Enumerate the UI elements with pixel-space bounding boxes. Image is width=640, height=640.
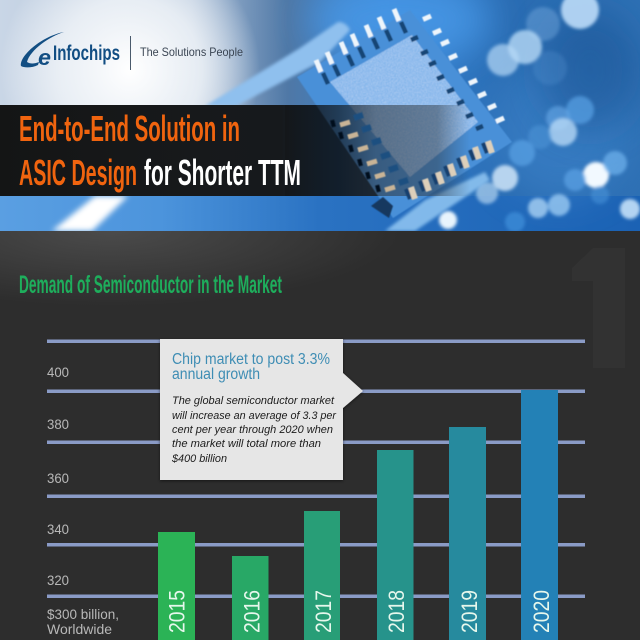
bar 2017: 2017 bbox=[311, 590, 336, 633]
lower beam bbox=[52, 196, 128, 231]
bar 2018 bbox=[377, 450, 414, 640]
callout body: will increase an average of 3.3 per bbox=[172, 410, 337, 422]
callout bbox=[160, 339, 363, 480]
dark content panel bbox=[0, 231, 640, 640]
bar 2015: 2015 bbox=[164, 590, 190, 633]
top chip pins bbox=[316, 9, 504, 122]
y axis labels: $300 billion, bbox=[47, 606, 119, 622]
title band bbox=[0, 105, 470, 196]
bar 2015 bbox=[158, 532, 195, 640]
callout heading: annual growth bbox=[172, 366, 260, 383]
bar 2016 bbox=[232, 556, 268, 640]
bar 2019: 2019 bbox=[457, 590, 482, 633]
logo: The Solutions People bbox=[140, 45, 243, 59]
lower chip pins bbox=[331, 115, 492, 218]
callout body: $400 billion bbox=[171, 453, 227, 465]
y axis labels bbox=[47, 364, 119, 637]
y axis labels: 320 bbox=[47, 572, 69, 588]
ghost section number 1 bbox=[572, 248, 625, 368]
callout heading bbox=[172, 351, 330, 383]
bokeh lights bbox=[439, 0, 640, 232]
callout body: cent per year through 2020 when bbox=[172, 424, 333, 436]
top chip pin sockets bbox=[323, 22, 483, 129]
bar 2019 bbox=[449, 427, 486, 640]
y axis labels: 400 bbox=[47, 364, 69, 380]
chip package bbox=[297, 9, 512, 218]
y axis labels: 380 bbox=[47, 416, 69, 432]
callout heading: Chip market to post 3.3% bbox=[172, 351, 330, 368]
section heading: Demand of Semiconductor in the Market bbox=[19, 271, 282, 299]
title line 1: End-to-End Solution in bbox=[19, 108, 240, 149]
bar 2017 bbox=[304, 511, 340, 640]
bar 2020: 2020 bbox=[529, 590, 554, 633]
callout body bbox=[171, 395, 337, 465]
y axis labels: Worldwide bbox=[47, 621, 112, 637]
logo swoosh bbox=[21, 32, 64, 67]
bar 2018: 2018 bbox=[384, 590, 409, 633]
callout body: the market will total more than bbox=[172, 438, 321, 450]
y axis labels: 340 bbox=[47, 521, 69, 537]
y axis labels: 360 bbox=[47, 470, 69, 486]
hero banner photo bbox=[0, 0, 640, 232]
bar 2016: 2016 bbox=[240, 590, 264, 633]
callout body: The global semiconductor market bbox=[172, 395, 335, 407]
logo bbox=[21, 32, 243, 70]
logo: e bbox=[38, 45, 51, 70]
title line 2 white: for Shorter TTM bbox=[144, 152, 301, 193]
logo: Infochips bbox=[53, 42, 120, 65]
bar 2020 bbox=[521, 390, 558, 640]
bar chart bbox=[47, 340, 585, 640]
tweezers arm bbox=[205, 22, 350, 106]
grid lines bbox=[47, 340, 585, 598]
title line 2: ASIC Design bbox=[19, 152, 137, 193]
